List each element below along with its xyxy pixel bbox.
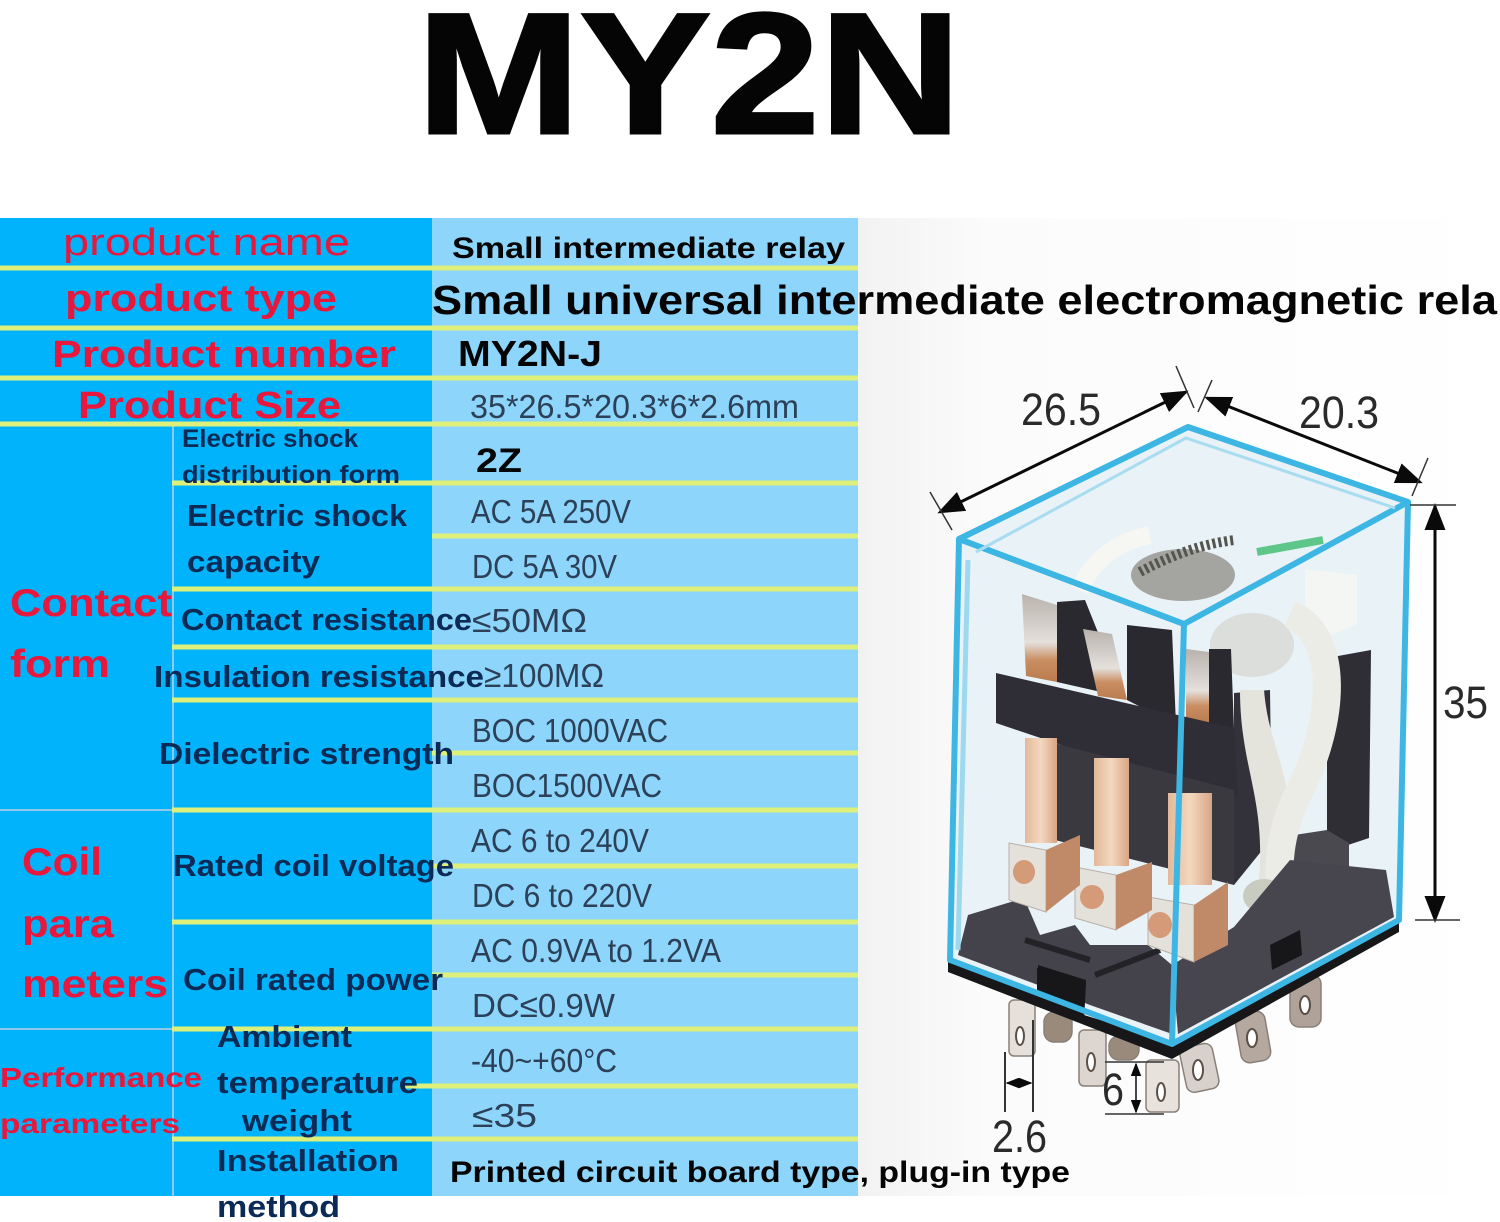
parameter values: ≤50MΩ	[472, 602, 587, 639]
parameter values: Small universal intermediate electromagnetic rela	[432, 277, 1498, 323]
parameter values: BOC1500VAC	[472, 767, 662, 804]
parameter labels: distribution form	[182, 461, 400, 489]
parameter labels	[154, 425, 484, 1222]
parameter values: -40~+60°C	[471, 1042, 617, 1079]
parameter values: AC 5A 250V	[471, 493, 631, 530]
relay pins	[1009, 975, 1321, 1112]
parameter labels: Dielectric strength	[159, 736, 454, 771]
parameter values: AC 0.9VA to 1.2VA	[471, 932, 721, 969]
dimension: 20.3: 20.3	[1299, 387, 1379, 438]
parameter labels: capacity	[187, 544, 321, 579]
parameter labels: Electric shock	[182, 425, 358, 453]
parameter values: 35*26.5*20.3*6*2.6mm	[470, 388, 799, 425]
parameter values: MY2N-J	[458, 333, 602, 374]
panel: relay background	[858, 218, 1500, 1196]
row labels: product name	[63, 222, 350, 264]
parameter values: Printed circuit board type, plug-in type	[450, 1156, 1070, 1189]
parameter values: ≤35	[472, 1097, 537, 1134]
dimension: 26.5	[930, 366, 1194, 530]
dimension: 35	[1410, 505, 1488, 920]
dimension: 6: 6	[1102, 1064, 1124, 1115]
row labels: Performance	[0, 1062, 202, 1093]
parameter labels: Contact resistance	[181, 602, 472, 637]
relay base	[958, 835, 1394, 1035]
parameter values	[432, 232, 1498, 1189]
relay housing interior	[950, 427, 1408, 1044]
parameter labels: weight	[241, 1103, 352, 1138]
row labels: Product Size	[78, 385, 341, 427]
parameter labels: temperature	[217, 1065, 418, 1100]
row labels: Product number	[52, 334, 396, 376]
parameter labels: Insulation resistance	[154, 659, 484, 694]
parameter values: 2Z	[476, 442, 522, 480]
dimension: 2.6	[992, 1020, 1047, 1162]
dimension: 6	[1102, 1062, 1164, 1115]
relay blades and bar	[996, 594, 1238, 885]
parameter labels: Electric shock	[187, 498, 408, 533]
parameter values: DC≤0.9W	[472, 987, 616, 1024]
parameter values: ≥100MΩ	[484, 657, 604, 694]
row labels: parameters	[0, 1108, 180, 1139]
parameter labels: Ambient	[217, 1019, 352, 1054]
dimension: 2.6: 2.6	[992, 1111, 1047, 1162]
row labels: meters	[22, 963, 168, 1006]
parameter labels: Installation	[217, 1143, 399, 1178]
parameter values: BOC 1000VAC	[472, 712, 668, 749]
row labels: Contact	[10, 582, 172, 625]
parameter values: DC 5A 30V	[472, 548, 617, 585]
row labels: form	[10, 643, 110, 686]
relay transparent cover edges	[950, 427, 1408, 1044]
row labels: product type	[65, 278, 337, 320]
parameter values: DC 6 to 220V	[472, 877, 652, 914]
parameter labels: Coil rated power	[183, 962, 443, 997]
panel: specification table background	[0, 218, 858, 1196]
row labels: para	[22, 903, 114, 946]
relay coil block	[1079, 535, 1371, 913]
row labels	[0, 222, 396, 1139]
row labels: Coil	[22, 841, 102, 884]
illustration: relay	[948, 427, 1408, 1112]
dimension: 20.3	[1198, 380, 1428, 496]
dimension: 26.5: 26.5	[1021, 384, 1101, 435]
dimension: 35: 35	[1443, 677, 1488, 728]
relay black base plate	[948, 920, 1399, 1059]
parameter values: AC 6 to 240V	[471, 822, 649, 859]
parameter labels: Rated coil voltage	[173, 848, 454, 883]
parameter values: Small intermediate relay	[452, 232, 845, 265]
